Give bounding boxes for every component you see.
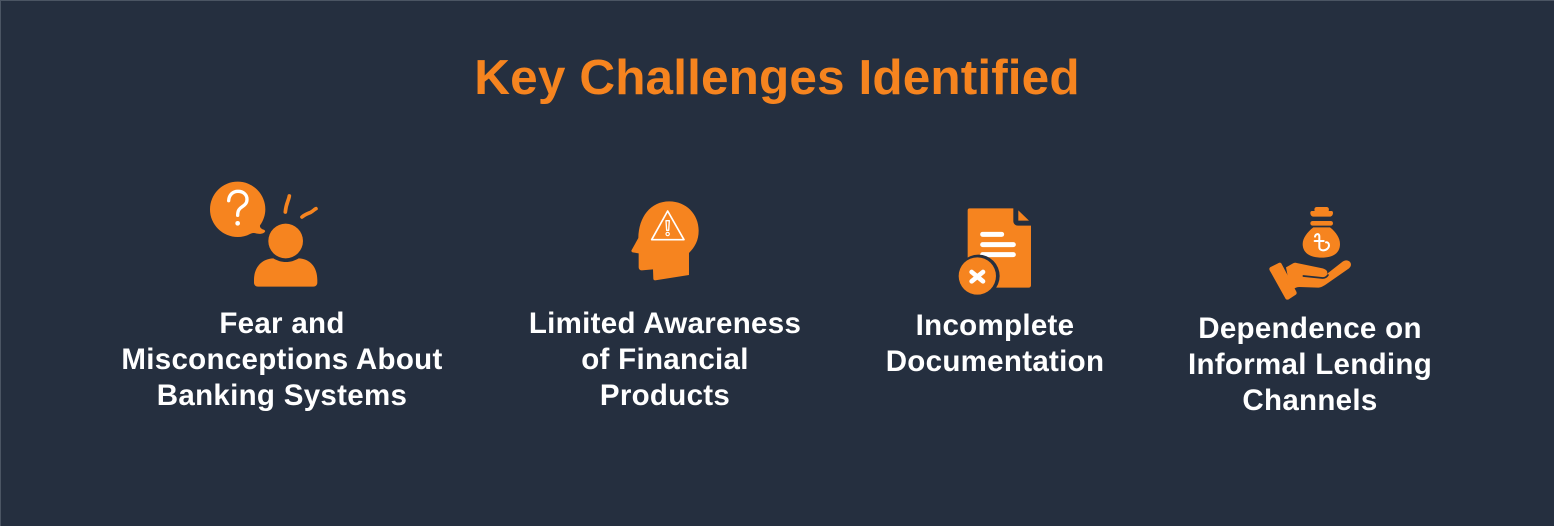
label: fear and misconceptions (121, 306, 443, 412)
label: fear and misconceptions: Misconceptions About (121, 342, 443, 376)
icon: document with x mark (957, 208, 1031, 297)
label: limited awareness: of Financial (581, 342, 749, 376)
label: incomplete documentation: Incomplete (916, 308, 1074, 342)
label: limited awareness: Limited Awareness (529, 306, 801, 340)
label: informal lending: Informal Lending (1188, 348, 1432, 380)
label: incomplete documentation (886, 308, 1104, 378)
label: limited awareness (529, 306, 801, 412)
label: limited awareness: Products (600, 378, 730, 412)
label: informal lending: Channels (1242, 384, 1378, 416)
label: fear and misconceptions: Fear and (219, 306, 345, 340)
icon: head with warning triangle (631, 201, 699, 280)
icon: person with question bubble (210, 182, 317, 287)
label: informal lending (1188, 312, 1432, 416)
label: informal lending: Dependence on (1198, 312, 1422, 344)
label: fear and misconceptions: Banking Systems (157, 378, 407, 412)
label: incomplete documentation: Documentation (886, 344, 1104, 378)
icon: hand holding money bag (1269, 207, 1351, 300)
title: Key Challenges Identified (474, 50, 1080, 105)
